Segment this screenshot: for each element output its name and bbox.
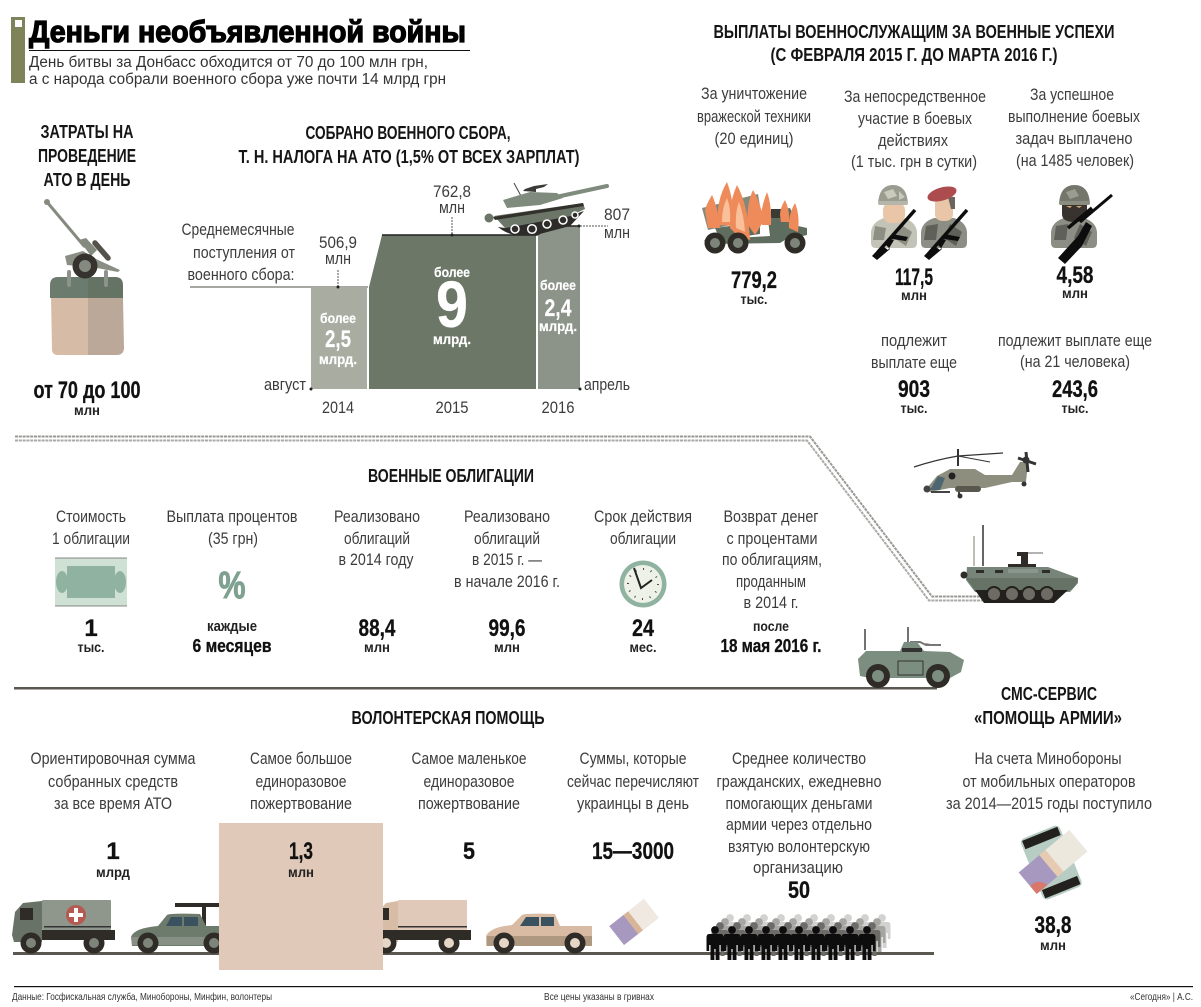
icon: percent: % xyxy=(218,565,246,607)
value: every 6 months: каждые xyxy=(207,618,257,635)
text and value: repayment date: Возврат денег xyxy=(724,507,818,526)
value: 117.5 mln xyxy=(895,264,933,303)
icon: calendar with howitzer xyxy=(44,199,124,355)
text: smallest donation: пожертвование xyxy=(418,794,520,813)
bar: 2015 xyxy=(369,235,536,389)
axis labels: 2016 xyxy=(542,398,574,417)
heading: daily costs: ПРОВЕДЕНИЕ xyxy=(38,145,136,166)
bar: 2016 xyxy=(538,226,580,389)
text: smallest donation: единоразовое xyxy=(424,772,514,791)
text: participation: За непосредственное xyxy=(844,87,986,106)
text: daily transfers xyxy=(567,749,699,813)
text: successful tasks xyxy=(1008,85,1140,170)
text and value: repayment date: по облигациям, xyxy=(722,550,822,569)
icon: phone with money xyxy=(1019,824,1087,901)
value: every 6 months xyxy=(192,618,272,656)
heading: levy: СОБРАНО ВОЕННОГО СБОРА, xyxy=(306,122,510,143)
heading: daily costs: АТО В ДЕНЬ xyxy=(44,169,130,190)
text and value: repayment date: проданным xyxy=(736,572,806,591)
bar: 2014: более xyxy=(320,310,356,326)
text: daily transfers: Суммы, которые xyxy=(580,749,686,768)
text and value: repayment date xyxy=(720,507,822,656)
text and value: sold in 2015-2016: в 2015 г. — xyxy=(472,550,542,569)
text: participation: участие в боевых xyxy=(858,109,972,128)
value: every 6 months: 6 месяцев xyxy=(192,636,272,656)
text and value: repayment date: 18 мая 2016 г. xyxy=(720,636,822,656)
label: monthly receipts: Среднемесячные xyxy=(182,220,294,239)
icon: tank xyxy=(484,183,607,235)
value: 1 thousand: тыс. xyxy=(78,639,104,655)
icon: helicopter xyxy=(914,449,1036,498)
value: 5: 5 xyxy=(463,838,475,865)
icon: two soldiers xyxy=(871,184,967,260)
panel: daily ATO costs xyxy=(34,121,140,418)
heading: volunteer aid: ВОЛОНТЕРСКАЯ ПОМОЩЬ xyxy=(352,707,544,728)
text: destroyed equipment: За уничтожение xyxy=(701,84,807,103)
value: 1.3 mln xyxy=(288,838,314,880)
value: 4.58 mln: млн xyxy=(1062,285,1088,301)
text: bond term: Срок действия xyxy=(594,507,692,526)
value: 24 months: мес. xyxy=(630,639,656,655)
value: 70 to 100 mln: от 70 до 100 xyxy=(34,377,140,404)
text: daily volunteers: гражданских, ежедневно xyxy=(716,772,882,791)
text: successful tasks: (на 1485 человек) xyxy=(1016,151,1134,170)
value: 807 mln: млн xyxy=(604,223,630,242)
value: 1 thousand: 1 xyxy=(84,615,98,642)
text: largest donation: пожертвование xyxy=(250,794,352,813)
text: smallest donation xyxy=(412,749,526,813)
text: bond term: облигации xyxy=(610,529,676,548)
text and value: sold in 2015-2016: млн xyxy=(494,639,520,655)
label: monthly receipts: поступления от xyxy=(193,243,295,262)
footer: sources: Данные: Госфискальная служба, Минобороны, Минфин, волонтеры xyxy=(12,991,272,1003)
value: 4.58 mln xyxy=(1056,262,1094,301)
value: 24 months xyxy=(630,615,656,655)
bar: 2015: млрд. xyxy=(433,331,471,347)
value: 15-3000: 15—3000 xyxy=(592,838,674,865)
value: 506.9 mln: 506,9 xyxy=(319,233,357,252)
text and value: 903 thousand to be paid: 903 xyxy=(898,376,930,403)
text and value: repayment date: с процентами xyxy=(726,529,818,548)
text: destroyed equipment xyxy=(697,84,811,148)
icon: armored car xyxy=(858,627,964,688)
value: 506.9 mln: млн xyxy=(325,249,351,268)
text and value: 243.6 thousand to be paid: подлежит выплате еще xyxy=(998,331,1152,350)
footer: currency note: Все цены указаны в гривнах xyxy=(544,991,655,1003)
text: daily volunteers: взятую волонтерскую xyxy=(728,837,870,856)
text: bond term xyxy=(594,507,692,548)
bar: 2015: более xyxy=(434,264,470,280)
heading: daily costs: ЗАТРАТЫ НА xyxy=(40,121,134,142)
text and value: sold in 2014: облигаций xyxy=(344,529,410,548)
icon: beige truck xyxy=(375,900,471,954)
value: 70 to 100 mln xyxy=(34,377,140,418)
text and value: repayment date: в 2014 г. xyxy=(744,593,798,612)
text: participation xyxy=(844,87,986,171)
label: monthly receipts xyxy=(182,220,295,284)
text: from mobile operators: На счета Минобороны xyxy=(974,749,1122,768)
axis labels: 2015 xyxy=(436,398,468,417)
icon: money bundle xyxy=(609,899,659,945)
text and value: sold in 2014: млн xyxy=(364,639,390,655)
title: Деньги необъявленной войны xyxy=(29,14,466,49)
bar: 2014: 2,5 xyxy=(325,326,351,353)
panel: volunteer aid xyxy=(12,707,934,970)
panel: war bonds xyxy=(52,465,822,656)
heading: SMS service: СМС-СЕРВИС xyxy=(1001,683,1097,704)
bar: 2014 xyxy=(311,287,367,389)
text: participation: действиях xyxy=(878,131,948,150)
heading: war bonds: ВОЕННЫЕ ОБЛИГАЦИИ xyxy=(368,465,534,486)
panel: payments to servicemen xyxy=(697,21,1152,416)
text: total sum: за все время АТО xyxy=(54,794,172,813)
value: 117.5 mln: млн xyxy=(901,287,927,303)
value: 1 billion xyxy=(96,838,130,880)
bar: 2016: 2,4 xyxy=(544,295,572,322)
title accent bar xyxy=(11,17,25,83)
icon: sniper xyxy=(1051,185,1112,264)
axis labels: 2014 xyxy=(322,398,354,417)
value: 70 to 100 mln: млн xyxy=(74,402,100,418)
text and value: sold in 2014: 88,4 xyxy=(358,615,396,642)
heading: payments xyxy=(714,21,1114,65)
icon: clock xyxy=(620,560,666,608)
axis labels xyxy=(264,375,630,417)
text and value: 903 thousand to be paid xyxy=(871,331,957,416)
value: 779.2 thousand: 779,2 xyxy=(731,267,777,294)
text and value: 903 thousand to be paid: подлежит xyxy=(881,331,947,350)
icon: pickup with machine gun xyxy=(131,903,225,954)
subtitle xyxy=(29,54,446,88)
icon: medical truck xyxy=(12,900,115,954)
value: 807 mln xyxy=(604,205,630,242)
text: destroyed equipment: вражеской техники xyxy=(697,107,811,126)
value: 1 billion: млрд xyxy=(96,864,130,880)
text: bond cost xyxy=(52,507,130,548)
text and value: sold in 2015-2016: Реализовано xyxy=(464,507,550,526)
text: interest payment: Выплата процентов xyxy=(166,507,298,526)
value: 807 mln: 807 xyxy=(604,205,630,224)
value: 38.8 mln: млн xyxy=(1040,937,1066,953)
value: 1.3 mln: 1,3 xyxy=(289,838,313,865)
bar: 2016: более xyxy=(540,277,576,293)
heading: daily costs xyxy=(38,121,136,190)
text: smallest donation: Самое маленькое xyxy=(412,749,526,768)
text: daily volunteers: помогающих деньгами xyxy=(726,794,872,813)
text: successful tasks: выполнение боевых xyxy=(1008,107,1140,126)
text and value: sold in 2014: Реализовано xyxy=(334,507,420,526)
icon: banknote xyxy=(55,558,127,606)
value: 762.8 mln: млн xyxy=(439,198,465,217)
axis labels: апрель xyxy=(584,375,630,394)
label: monthly receipts: военного сбора: xyxy=(188,265,294,284)
subtitle: а с народа собрали военного сбора уже почти 14 млрд грн xyxy=(29,71,446,88)
value: 762.8 mln xyxy=(433,182,471,217)
text and value: 243.6 thousand to be paid: тыс. xyxy=(1062,400,1088,416)
text: from mobile operators: за 2014—2015 годы поступило xyxy=(946,794,1152,813)
value: 4.58 mln: 4,58 xyxy=(1056,262,1094,289)
text and value: 903 thousand to be paid: выплате еще xyxy=(871,353,957,372)
value: 779.2 thousand xyxy=(731,267,777,307)
text: daily transfers: украинцы в день xyxy=(577,794,689,813)
text: daily volunteers: Среднее количество xyxy=(732,749,866,768)
axis labels: август xyxy=(264,375,306,394)
divider with armored car xyxy=(14,627,964,690)
text: participation: (1 тыс. грн в сутки) xyxy=(851,152,977,171)
text: successful tasks: За успешное xyxy=(1030,85,1114,104)
bar: 2016: млрд. xyxy=(539,318,577,334)
heading: levy xyxy=(238,122,580,167)
road line xyxy=(13,952,934,955)
text: successful tasks: задач выплачено xyxy=(1016,129,1132,148)
value: 779.2 thousand: тыс. xyxy=(740,291,768,307)
text: largest donation: Самое большое xyxy=(250,749,352,768)
text and value: sold in 2015-2016: 99,6 xyxy=(488,615,526,642)
icon: infantry fighting vehicle xyxy=(960,525,1078,603)
value: 1 thousand xyxy=(78,615,104,655)
text: largest donation xyxy=(250,749,352,813)
footer xyxy=(12,986,1193,1003)
value: 24 months: 24 xyxy=(632,615,655,642)
text: total sum: Ориентировочная сумма xyxy=(30,749,196,768)
panel: SMS service xyxy=(946,683,1152,953)
text: daily volunteers xyxy=(716,749,882,877)
text and value: 243.6 thousand to be paid xyxy=(998,331,1152,416)
value: 762.8 mln: 762,8 xyxy=(433,182,471,201)
heading: levy: Т. Н. НАЛОГА НА АТО (1,5% ОТ ВСЕХ ЗАРПЛАТ) xyxy=(238,146,580,167)
panel: military levy chart xyxy=(182,122,630,417)
bar: 2014: млрд. xyxy=(319,351,357,367)
value: 38.8 mln: 38,8 xyxy=(1034,912,1072,939)
text and value: repayment date: после xyxy=(753,618,789,634)
value: 1 billion: 1 xyxy=(106,838,120,865)
text: daily transfers: сейчас перечисляют xyxy=(567,772,699,791)
text: total sum xyxy=(30,749,196,813)
text: destroyed equipment: (20 единиц) xyxy=(714,129,794,148)
value: 38.8 mln xyxy=(1034,912,1072,953)
text: from mobile operators: от мобильных операторов xyxy=(962,772,1136,791)
text: interest payment: (35 грн) xyxy=(208,529,258,548)
text and value: sold in 2014 xyxy=(334,507,420,655)
icon: beige pickup xyxy=(486,914,592,954)
text and value: sold in 2015-2016 xyxy=(454,507,560,655)
text: total sum: собранных средств xyxy=(48,772,178,791)
step bar chart xyxy=(190,217,608,390)
value: 506.9 mln xyxy=(319,233,357,268)
subtitle: День битвы за Донбасс обходится от 70 до 100 млн грн, xyxy=(29,54,428,71)
heading: SMS service xyxy=(974,683,1122,728)
icon: crowd of people xyxy=(706,914,890,960)
text: bond cost: Стоимость xyxy=(56,507,126,526)
text and value: sold in 2015-2016: облигаций xyxy=(474,529,540,548)
text and value: 243.6 thousand to be paid: (на 21 человека) xyxy=(1020,352,1130,371)
text: daily volunteers: армии через отдельно xyxy=(726,815,872,834)
text and value: sold in 2014: в 2014 году xyxy=(338,550,414,569)
bar: 2015: 9 xyxy=(436,267,468,341)
value: 50: 50 xyxy=(788,877,810,904)
heading: SMS service: «ПОМОЩЬ АРМИИ» xyxy=(974,707,1122,728)
text: interest payment xyxy=(166,507,298,548)
text: bond cost: 1 облигации xyxy=(52,529,130,548)
text: largest donation: единоразовое xyxy=(256,772,346,791)
text and value: 243.6 thousand to be paid: 243,6 xyxy=(1052,376,1098,403)
text and value: sold in 2015-2016: в начале 2016 г. xyxy=(454,572,560,591)
text: daily volunteers: организацию xyxy=(753,858,843,877)
title block xyxy=(11,14,470,88)
icon: burning rocket truck xyxy=(702,182,807,254)
value: 117.5 mln: 117,5 xyxy=(895,264,933,291)
text: from mobile operators xyxy=(946,749,1152,813)
value: 1.3 mln: млн xyxy=(288,864,314,880)
heading: payments: (С ФЕВРАЛЯ 2015 Г. ДО МАРТА 2016 Г.) xyxy=(770,44,1058,65)
text and value: 903 thousand to be paid: тыс. xyxy=(900,400,928,416)
panel: largest donation backdrop xyxy=(219,823,383,970)
